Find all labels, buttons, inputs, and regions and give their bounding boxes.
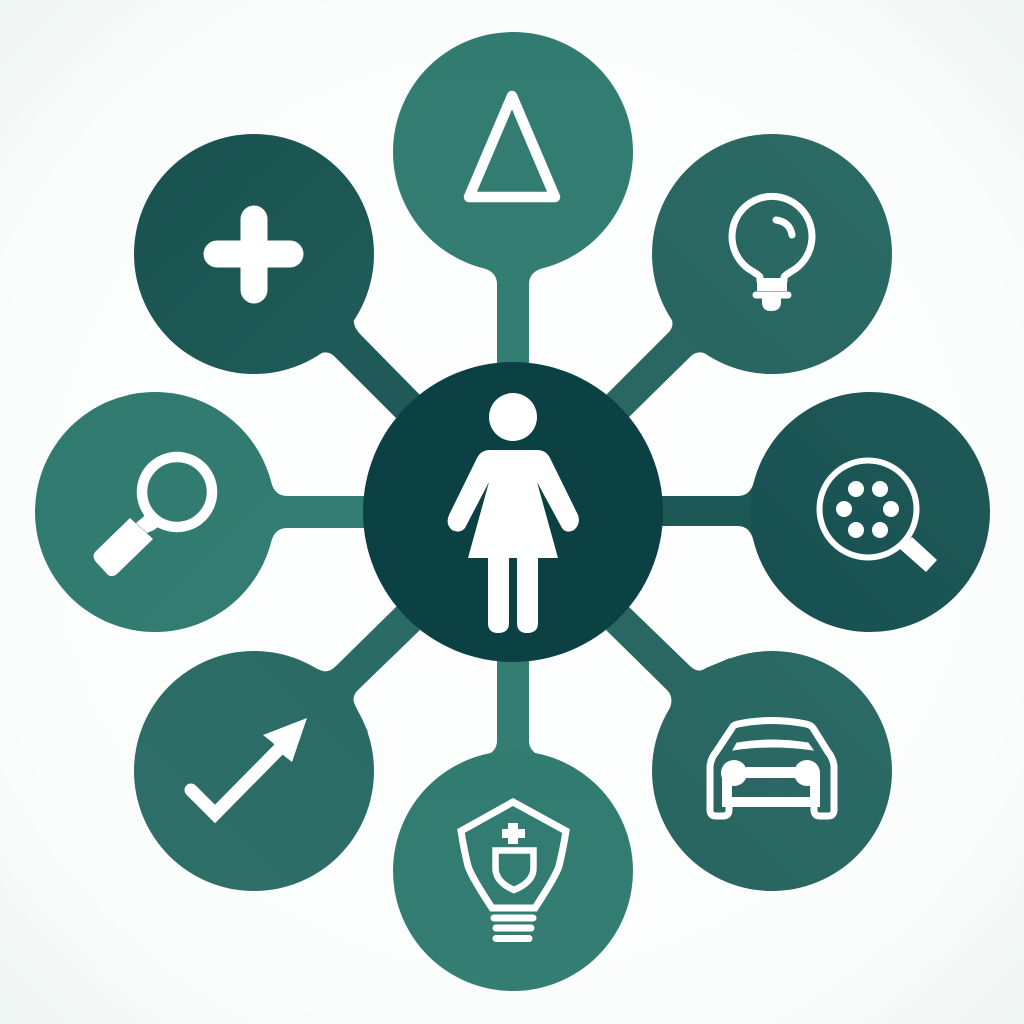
icon: triangle xyxy=(469,96,555,197)
center hub xyxy=(363,362,663,662)
icon: female figure xyxy=(448,393,579,633)
icon: shield light bulb xyxy=(461,802,566,938)
connector: right xyxy=(655,482,754,542)
satellite: bottom shield bulb xyxy=(393,751,633,991)
satellite: left magnifier xyxy=(35,392,275,632)
icon: check arrow xyxy=(191,718,307,814)
icon: magnifier with dots xyxy=(820,460,937,572)
connector: lower left xyxy=(254,606,420,771)
icon: magnifying glass xyxy=(94,457,212,576)
connector: upper right xyxy=(606,254,772,418)
connector: left xyxy=(271,482,370,542)
satellite: upper right light bulb xyxy=(652,134,892,374)
icon: car xyxy=(710,720,834,816)
connector: bottom xyxy=(483,655,543,757)
connector: top xyxy=(483,268,543,370)
satellite: upper left plus xyxy=(134,134,374,374)
connector: upper left xyxy=(254,254,420,418)
satellite: right virus magnifier xyxy=(750,392,990,632)
connector: lower right xyxy=(606,606,772,771)
satellite: lower right car xyxy=(652,651,892,891)
icon: plus xyxy=(217,219,290,290)
satellite: lower left arrow xyxy=(134,651,374,891)
icon: light bulb xyxy=(732,196,812,311)
satellite: top triangle xyxy=(393,32,633,272)
